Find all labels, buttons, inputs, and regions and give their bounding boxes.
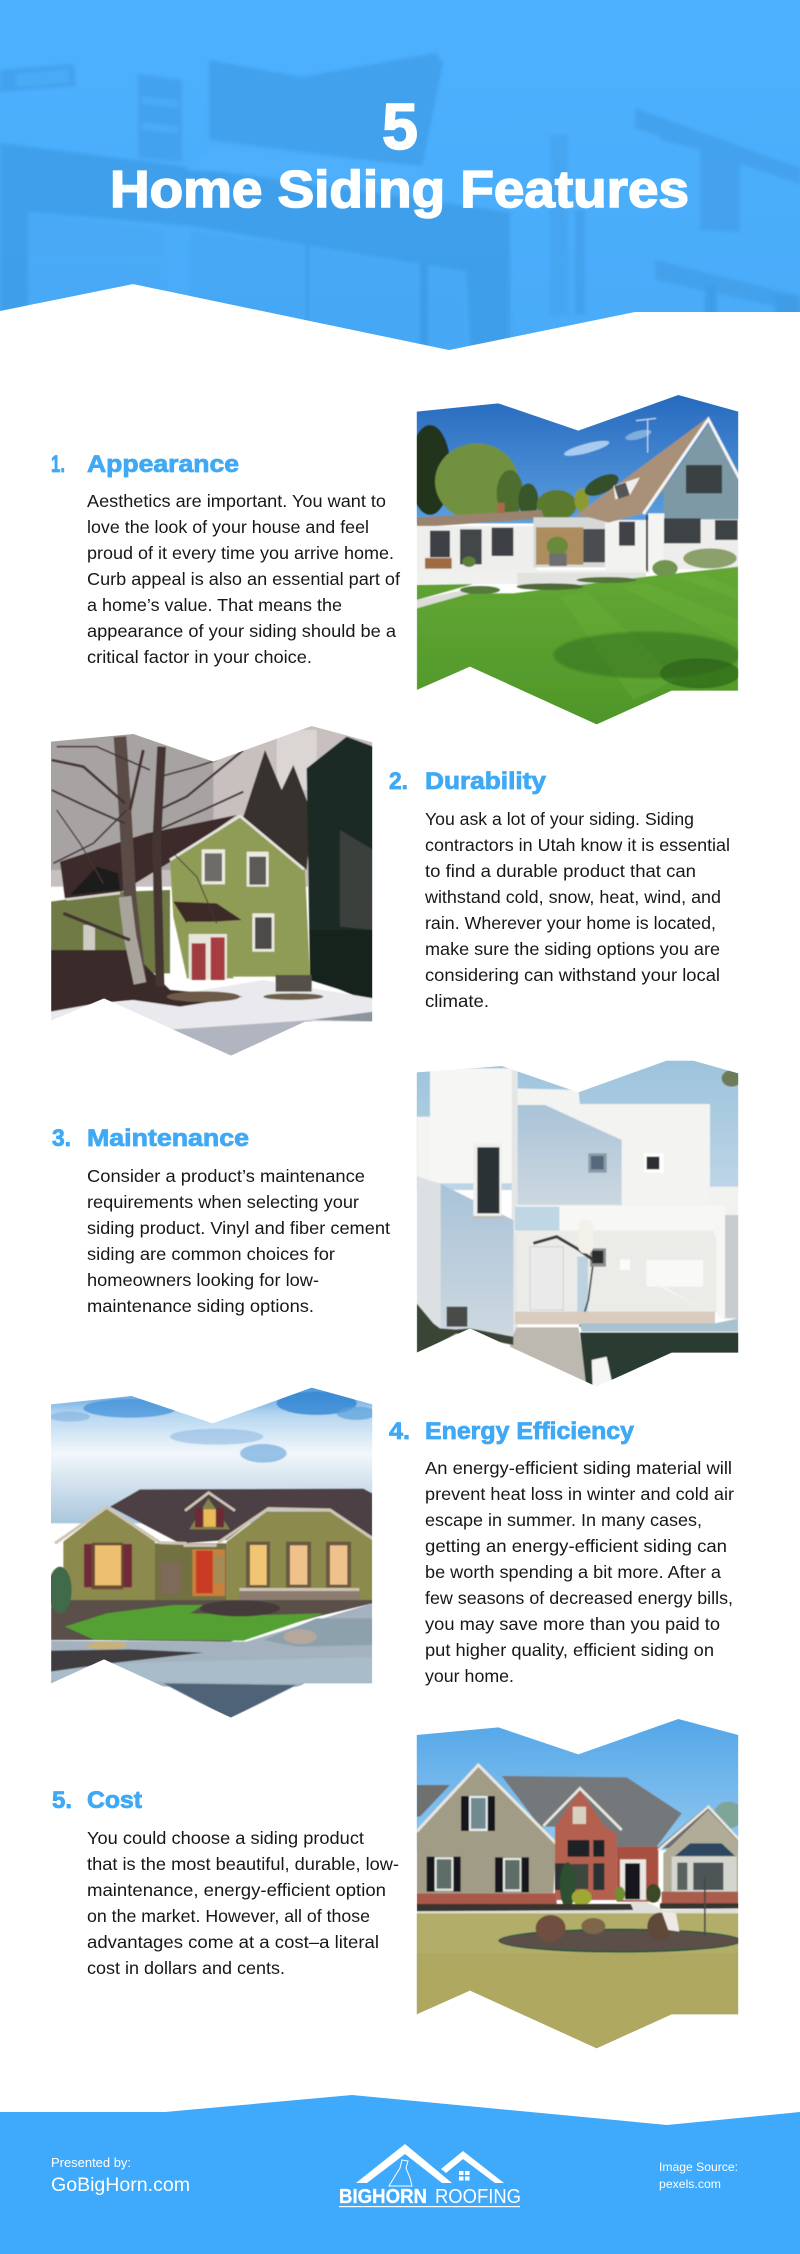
- text block: energy efficiency: escape in summer. In many cases,: [425, 1510, 702, 1530]
- text block: appearance: Curb appeal is also an essential part of: [87, 569, 400, 589]
- text block: cost: on the market. However, all of those: [87, 1906, 370, 1926]
- text block: energy efficiency: be worth spending a bit more. After a: [425, 1562, 721, 1582]
- text block: energy efficiency: prevent heat loss in winter and cold air: [425, 1484, 734, 1504]
- text block: durability: rain. Wherever your home is located,: [425, 913, 716, 933]
- text block: durability: [424, 809, 730, 1011]
- icon: Bighorn Roofing logo: ROOFING: [435, 2186, 521, 2208]
- heading: 2. Durability: Durability: [425, 768, 547, 795]
- footer: presented by: GoBigHorn.com: [51, 2175, 190, 2196]
- text block: cost: advantages come at a cost–a literal: [87, 1932, 379, 1952]
- text block: durability: considering can withstand your local: [425, 965, 720, 985]
- text block: energy efficiency: put higher quality, efficient siding on: [425, 1640, 714, 1660]
- text block: cost: cost in dollars and cents.: [87, 1958, 285, 1978]
- text block: energy efficiency: few seasons of decreased energy bills,: [425, 1588, 733, 1608]
- icon: Bighorn Roofing logo: [339, 2144, 521, 2208]
- photo: beige and brick house with dry lawn: [413, 1717, 743, 2053]
- text block: energy efficiency: getting an energy-efficient siding can: [425, 1536, 727, 1556]
- title: [110, 90, 689, 219]
- photo: green wooden house with bare trees in snow: [47, 720, 377, 1060]
- heading: 5. Cost: Cost: [87, 1787, 142, 1814]
- heading: 1. Appearance: Appearance: [87, 451, 239, 478]
- text block: appearance: [87, 491, 400, 667]
- text block: maintenance: homeowners looking for low-: [87, 1270, 319, 1290]
- footer: image source: [659, 2160, 738, 2191]
- text block: maintenance: siding are common choices for: [87, 1244, 335, 1264]
- text block: maintenance: maintenance siding options.: [87, 1296, 314, 1316]
- heading: 4. Energy Efficiency: Energy Efficiency: [425, 1418, 635, 1445]
- photo: modern white house: [413, 1057, 743, 1390]
- text block: maintenance: Consider a product’s maintenance: [87, 1166, 365, 1186]
- heading: 5. Cost: 5.: [52, 1787, 72, 1814]
- text block: cost: [87, 1828, 399, 1978]
- text block: durability: withstand cold, snow, heat, wind, and: [424, 887, 721, 907]
- heading: 1. Appearance: 1.: [51, 451, 65, 478]
- text block: energy efficiency: you may save more than you paid to: [425, 1614, 720, 1634]
- text block: maintenance: [87, 1166, 390, 1316]
- text block: cost: maintenance, energy-efficient option: [87, 1880, 386, 1900]
- text block: maintenance: siding product. Vinyl and fiber cement: [87, 1218, 390, 1238]
- text block: cost: You could choose a siding product: [87, 1828, 364, 1848]
- heading: 3. Maintenance: Maintenance: [87, 1125, 249, 1152]
- footer band: [0, 2095, 800, 2254]
- text block: durability: make sure the siding options you are: [425, 939, 720, 959]
- text block: durability: to find a durable product that can: [425, 861, 696, 881]
- photo: white house with blue gable and striped lawn: [409, 390, 743, 727]
- footer: image source: pexels.com: [659, 2177, 721, 2191]
- text block: energy efficiency: An energy-efficient siding material will: [425, 1458, 732, 1478]
- text block: appearance: critical factor in your choice.: [87, 647, 312, 667]
- text block: durability: You ask a lot of your siding. Siding: [425, 809, 694, 829]
- heading: 5. Cost: [52, 1787, 142, 1814]
- text block: durability: contractors in Utah know it is essential: [425, 835, 730, 855]
- header banner with faded building: [0, 0, 800, 350]
- title: 5: [382, 90, 418, 163]
- text block: appearance: proud of it every time you arrive home.: [87, 543, 394, 563]
- text block: appearance: a home’s value. That means the: [87, 595, 342, 615]
- footer: image source: Image Source:: [659, 2160, 738, 2174]
- heading: 4. Energy Efficiency: 4.: [389, 1418, 410, 1445]
- text block: energy efficiency: [425, 1458, 734, 1686]
- photo: olive stucco house at dusk: [47, 1383, 377, 1718]
- text block: appearance: love the look of your house and feel: [87, 517, 369, 537]
- text block: energy efficiency: your home.: [425, 1666, 514, 1686]
- text block: cost: that is the most beautiful, durable, low-: [87, 1854, 399, 1874]
- text block: appearance: appearance of your siding should be a: [87, 621, 396, 641]
- icon: Bighorn Roofing logo: BIGHORN: [339, 2186, 427, 2208]
- text block: durability: climate.: [425, 991, 489, 1011]
- text block: appearance: Aesthetics are important. You want to: [87, 491, 386, 511]
- heading: 3. Maintenance: 3.: [52, 1125, 71, 1152]
- title: Home Siding Features: [110, 161, 689, 219]
- text block: maintenance: requirements when selecting your: [87, 1192, 359, 1212]
- footer: presented by: [51, 2155, 190, 2196]
- footer: presented by: Presented by:: [51, 2155, 131, 2170]
- heading: 2. Durability: 2.: [389, 768, 408, 795]
